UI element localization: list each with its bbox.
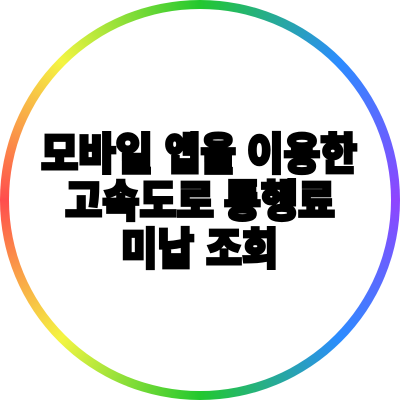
title line 2: 고속도로 [65, 178, 214, 226]
title line 1: 앱을 [165, 132, 236, 180]
title line 3: 미납 [121, 226, 194, 274]
title line 3 [121, 226, 278, 274]
title line 3: 조회 [206, 226, 278, 274]
title line 1 [41, 132, 357, 180]
title line 2: 통행료 [224, 178, 335, 226]
title line 2 [65, 178, 335, 226]
title line 1: 이용한 [247, 132, 357, 180]
title line 1: 모바일 [41, 132, 153, 180]
